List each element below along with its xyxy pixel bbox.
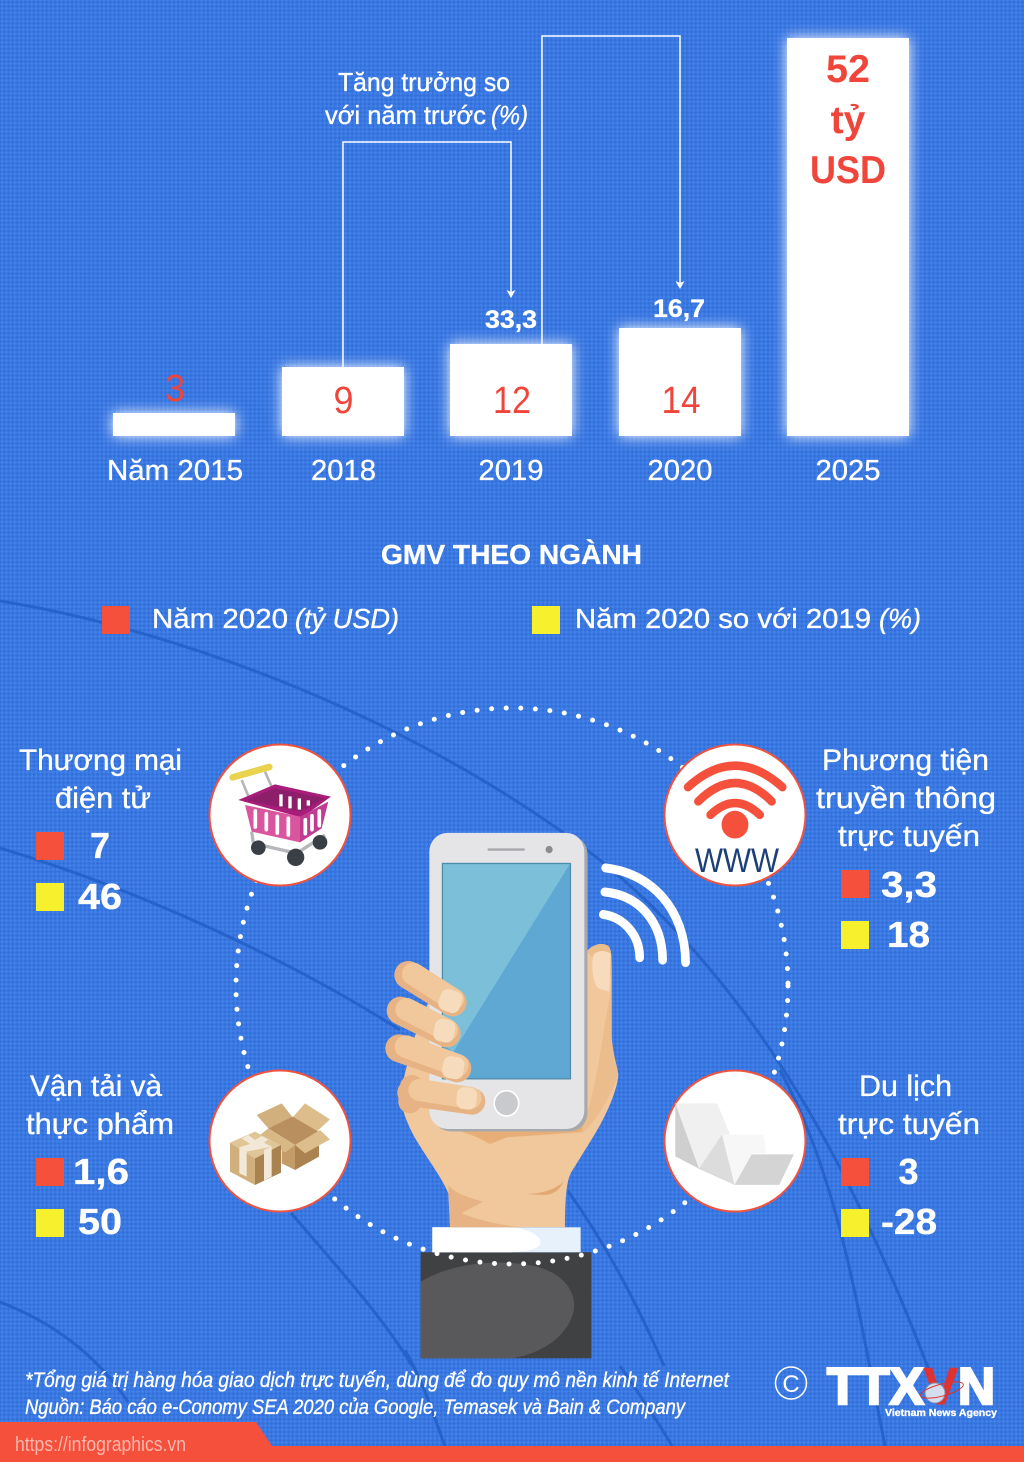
fingers [399, 974, 478, 1110]
bar: 2015: 3 [165, 368, 185, 410]
icon: online travel (folded map) [664, 1070, 806, 1212]
growth caption: Tăng trưởng so [338, 67, 510, 97]
bar: 2019: 33,3 [485, 306, 537, 334]
panel: transport and food: Vận tải và [30, 1070, 162, 1103]
jacket sleeve [421, 1252, 591, 1358]
panel: transport and food: 50 [78, 1201, 122, 1242]
dotted ring [236, 708, 788, 1264]
arrow: 2019 to 2020 [542, 36, 684, 344]
icon: cardboard boxes [210, 1070, 350, 1212]
bar: 2020: 2020 [648, 455, 712, 487]
panel: online media [816, 744, 996, 955]
bar: 2020: 16,7 [653, 295, 705, 323]
panel: online media: 3,3 [881, 864, 937, 905]
panel: e-commerce: 46 [78, 876, 122, 917]
bar: 2020 [619, 295, 741, 487]
arrow: 2018 to 2019 [343, 142, 516, 367]
panel: online travel [838, 1070, 980, 1242]
panel: online media: Phương tiện [822, 744, 989, 777]
panel: e-commerce: Thương mại [19, 744, 182, 777]
growth caption [325, 67, 528, 130]
panel: online media: 18 [887, 914, 930, 955]
panel: e-commerce [19, 744, 182, 917]
bar: 2025 [787, 38, 909, 487]
shirt cuff [432, 1227, 581, 1252]
icon: wifi www [664, 744, 806, 886]
bar: 2018 [282, 367, 404, 487]
heading: GMV by sector: GMV THEO NGÀNH [381, 539, 642, 570]
footer bar with url tab: https://infographics.vn [15, 1434, 186, 1456]
icon: copyright: C [782, 1371, 800, 1398]
bar: 2019: 12 [493, 380, 531, 422]
bar: 2019: 2019 [478, 455, 544, 487]
legend: (tỷ USD) [295, 603, 399, 634]
growth caption: (%) [491, 100, 528, 130]
footnote and source: *Tổng giá trị hàng hóa giao dịch trực tuyến, dùng để đo quy mô nền kinh tế Internet [25, 1369, 730, 1392]
bar: 2015: Năm 2015 [107, 455, 243, 487]
growth caption: với năm trước [325, 100, 486, 130]
bar: 2020: 14 [662, 380, 700, 422]
icon: wifi www: WWW [695, 842, 779, 880]
panel: online travel: Du lịch [859, 1070, 952, 1103]
panel: transport and food: 1,6 [73, 1151, 129, 1192]
logo: TTXVN: Vietnam News Agency [885, 1407, 997, 1419]
legend [102, 603, 921, 634]
bar: 2025: USD [810, 149, 886, 192]
panel: transport and food [26, 1070, 174, 1242]
icon: shopping cart [210, 744, 350, 886]
panel: transport and food: thực phẩm [26, 1108, 174, 1141]
panel: online media: truyền thông [816, 782, 996, 815]
panel: e-commerce: 7 [90, 825, 110, 866]
bar: 2018: 9 [334, 380, 354, 422]
legend: Năm 2020 so với 2019 [575, 603, 871, 634]
smartphone [429, 833, 587, 1131]
palm and thumb [400, 944, 618, 1227]
logo: TTXVN: TTXVN [827, 1358, 995, 1416]
panel: online media: trực tuyến [838, 820, 980, 853]
bar: 2025: tỷ [831, 99, 866, 142]
legend: (%) [879, 603, 921, 634]
footnote and source [25, 1369, 730, 1419]
bar: 2025: 52 [826, 48, 870, 91]
bar: 2025: 2025 [816, 455, 880, 487]
bar: 2018: 2018 [311, 455, 376, 487]
icon: copyright [776, 1367, 806, 1399]
panel: e-commerce: điện tử [55, 782, 151, 815]
footer bar with url tab [0, 1422, 1024, 1462]
panel: online travel: trực tuyến [838, 1108, 980, 1141]
bar chart: GMV by year [107, 38, 909, 487]
legend: Năm 2020 [152, 603, 288, 634]
bar: 2015 [107, 368, 243, 487]
bar: 2019 [450, 306, 572, 487]
signal waves [603, 868, 686, 963]
illustration: hand holding phone [399, 833, 686, 1358]
footnote and source: Nguồn: Báo cáo e-Conomy SEA 2020 của Google, Temasek và Bain & Company [25, 1396, 686, 1419]
panel: online travel: -28 [881, 1201, 937, 1242]
panel: online travel: 3 [898, 1151, 919, 1192]
